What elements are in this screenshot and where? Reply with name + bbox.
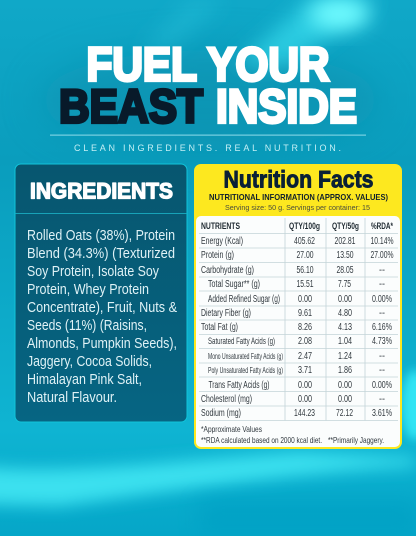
nutrition table (196, 216, 400, 447)
row: trans fatty acids: 0.00 (298, 380, 312, 391)
row: cholesterol: 0.00 (298, 394, 312, 405)
row: trans fatty acids: 0.00 (338, 380, 352, 391)
row: dietary fiber (201, 308, 385, 319)
ingredients text (27, 227, 177, 406)
row: trans fatty acids: Trans Fatty Acids (g) (208, 380, 270, 391)
row: saturated fatty acids: 4.73% (372, 336, 392, 347)
row: energy: 202.81 (334, 236, 356, 247)
row: poly unsaturated fatty acids: 3.71 (298, 365, 312, 376)
panel: ingredients (15, 164, 187, 422)
row: saturated fatty acids (208, 336, 392, 347)
row: sodium: 3.61% (372, 408, 392, 419)
row: energy: Energy (Kcal) (201, 236, 243, 247)
row: carbohydrate: -- (379, 265, 385, 276)
table rows (201, 236, 394, 419)
row: sodium (201, 408, 392, 419)
row: dietary fiber: Dietary Fiber (g) (201, 308, 251, 319)
row: energy: 405.62 (294, 236, 315, 247)
footnotes: **RDA calculated based on 2000 kcal diet. (201, 435, 322, 445)
ingredients text: Seeds (11%) (Raisins, (27, 317, 147, 334)
row: mono unsaturated fatty acids: -- (379, 351, 385, 362)
table header row: %RDA* (371, 221, 393, 232)
row: mono unsaturated fatty acids: 1.24 (338, 351, 352, 362)
row: dietary fiber: -- (379, 308, 385, 319)
ingredients text: Himalayan Pink Salt, (27, 371, 142, 388)
row: cholesterol: 0.00 (338, 394, 352, 405)
row: added refined sugar: 0.00 (338, 294, 352, 305)
row: sodium: 72.12 (336, 408, 353, 419)
panel: nutrition facts (194, 164, 402, 449)
row: total sugar: -- (379, 279, 385, 290)
row: saturated fatty acids: 2.08 (298, 336, 312, 347)
row: sodium: 144.23 (294, 408, 315, 419)
row: saturated fatty acids: Saturated Fatty Acids (g) (208, 336, 275, 346)
footnotes (201, 424, 384, 445)
row: energy: 10.14% (370, 236, 394, 247)
row: total sugar: 15.51 (296, 279, 314, 290)
serving size: Serving size: 50 g. Servings per container: 15 (225, 203, 370, 212)
ingredients text: Blend (34.3%) (Texturized (27, 245, 175, 262)
row: trans fatty acids (208, 380, 392, 391)
row: added refined sugar: 0.00% (372, 294, 392, 305)
title line: FUEL YOUR: FUEL YOUR (86, 38, 330, 90)
table header row: NUTRIENTS (201, 221, 240, 232)
row: added refined sugar: Added Refined Sugar (g) (208, 294, 280, 305)
row: total sugar (208, 279, 385, 290)
row: poly unsaturated fatty acids: Poly Unsaturated Fatty Acids (g) (208, 365, 283, 375)
ingredients text: Concentrate), Fruit, Nuts & (27, 299, 177, 316)
row: energy (201, 236, 394, 247)
row: protein (201, 250, 394, 261)
row: dietary fiber: 4.80 (338, 308, 352, 319)
row: sodium: Sodium (mg) (201, 408, 241, 419)
row: total fat: 4.13 (338, 322, 352, 333)
row: carbohydrate: Carbohydrate (g) (201, 265, 254, 276)
nutrition heading: Nutrition Facts (224, 166, 374, 194)
ingredients text: Protein, Whey Protein (27, 281, 149, 298)
title (59, 38, 357, 132)
table header row: QTY/100g (289, 221, 320, 232)
ingredients text: Natural Flavour. (27, 389, 117, 406)
row: carbohydrate: 28.05 (336, 265, 354, 276)
row: protein: Protein (g) (201, 250, 234, 261)
row: cholesterol: -- (379, 394, 385, 405)
row: added refined sugar (208, 294, 392, 305)
row: protein: 27.00% (370, 250, 394, 261)
ingredients text: Soy Protein, Isolate Soy (27, 263, 159, 280)
footnotes: **Primarily Jaggery. (328, 435, 384, 445)
row: total fat: 6.16% (372, 322, 392, 333)
ingredients text: Rolled Oats (38%), Protein (27, 227, 175, 244)
ingredients heading: INGREDIENTS (30, 178, 173, 204)
row: total sugar: Total Sugar** (g) (208, 279, 260, 290)
table header row (201, 221, 393, 232)
row: trans fatty acids: 0.00% (372, 380, 392, 391)
row: carbohydrate (201, 265, 385, 276)
row: poly unsaturated fatty acids: -- (379, 365, 385, 376)
row: poly unsaturated fatty acids (208, 365, 385, 376)
nutrition subheading: NUTRITIONAL INFORMATION (APPROX. VALUES) (209, 192, 388, 202)
ingredients text: Almonds, Pumpkin Seeds), (27, 335, 177, 352)
row: saturated fatty acids: 1.04 (338, 336, 352, 347)
row: protein: 27.00 (296, 250, 314, 261)
ingredients text: Jaggery, Cocoa Solids, (27, 353, 152, 370)
row: mono unsaturated fatty acids (208, 351, 385, 362)
subtitle: CLEAN INGREDIENTS. REAL NUTRITION. (74, 143, 341, 153)
row: mono unsaturated fatty acids: Mono Unsaturated Fatty Acids (g) (208, 351, 283, 361)
title word: INSIDE: INSIDE (216, 80, 357, 132)
row: poly unsaturated fatty acids: 1.86 (338, 365, 352, 376)
row: total fat (201, 322, 392, 333)
row: cholesterol: Cholesterol (mg) (201, 394, 252, 405)
row: carbohydrate: 56.10 (296, 265, 314, 276)
row: total fat: Total Fat (g) (201, 322, 238, 333)
title word: BEAST: BEAST (59, 80, 203, 132)
row: added refined sugar: 0.00 (298, 294, 312, 305)
row: cholesterol (201, 394, 385, 405)
row: protein: 13.50 (336, 250, 354, 261)
footnotes: *Approximate Values (201, 424, 262, 434)
row: total fat: 8.26 (298, 322, 312, 333)
table header row: QTY/50g (332, 221, 359, 232)
row: dietary fiber: 9.61 (298, 308, 312, 319)
row: mono unsaturated fatty acids: 2.47 (298, 351, 312, 362)
row: total sugar: 7.75 (338, 279, 351, 290)
